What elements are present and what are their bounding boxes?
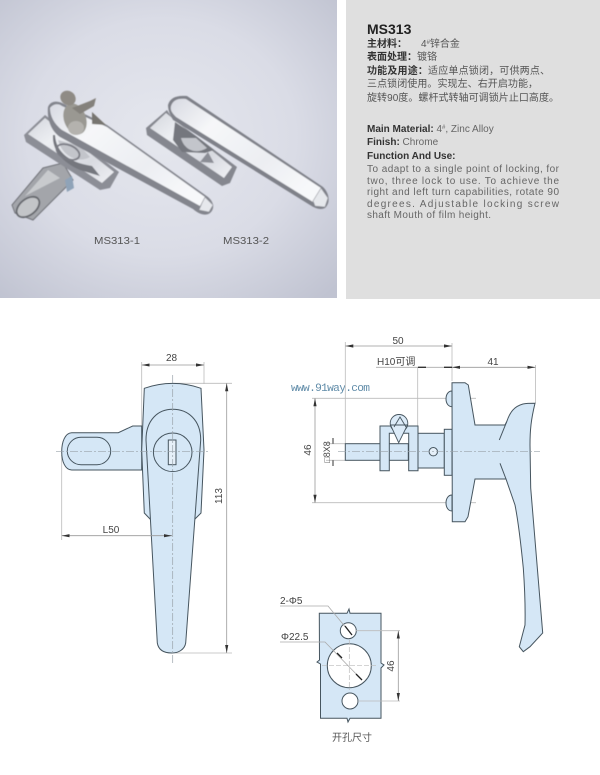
- photo: handle MS313-2: [146, 96, 329, 209]
- text: English specifications: #: [442, 125, 446, 131]
- label: 2-Φ5: [280, 596, 352, 635]
- text: English specifications: shaft Mouth of film height.: [367, 210, 491, 221]
- locking cone: [390, 414, 408, 443]
- diagram: side view: [303, 336, 543, 652]
- panel: specifications: [346, 0, 600, 299]
- label: Φ22.5: [280, 632, 362, 680]
- text: Chinese specifications: 主材料：: [367, 37, 407, 50]
- text: Chinese specifications: 功能及用途：适应单点锁闭，可供两点、: [367, 64, 550, 77]
- text: Chinese specifications: 表面处理：镀铬: [367, 50, 437, 63]
- dimension: 28: 28: [166, 353, 177, 364]
- text: English specifications: degrees. Adjustable locking screw: [367, 199, 560, 210]
- dimension: L50: L50: [103, 525, 120, 536]
- text: English specifications: right and left turn capabilities, rotate 90: [367, 187, 559, 198]
- caption: MS313-2: MS313-2: [223, 235, 269, 247]
- dimension: 46: [303, 398, 315, 503]
- dimension: 50: 50: [392, 336, 404, 347]
- dimension: 113: 113: [214, 488, 225, 504]
- text: Chinese specifications: [367, 37, 559, 104]
- label: 2-Φ5: 2-Φ5: [280, 596, 303, 607]
- small hole bottom: [342, 693, 358, 709]
- watermark: www.91way.com: [291, 383, 370, 395]
- cutout plate: [317, 609, 384, 722]
- label: Φ22.5: Φ22.5: [281, 632, 309, 643]
- text: English specifications: Finish: Chrome: [367, 137, 439, 148]
- heading: model number: MS313: [367, 21, 412, 37]
- photo: handle MS313-1 with key: [12, 88, 213, 221]
- caption: cutout size: 开孔尺寸: [332, 731, 372, 744]
- dimension: 46: 46: [303, 444, 314, 456]
- dimension: square 8x8: □8X8: [322, 441, 332, 463]
- text: Chinese specifications: 4: [421, 39, 427, 50]
- text: Chinese specifications: 锌合金: [430, 37, 460, 50]
- flange: [444, 429, 452, 475]
- dimension: H10 adjustable: [376, 356, 452, 368]
- text: English specifications: Main Material: 4: [367, 124, 442, 135]
- dimension: 41: 41: [487, 357, 499, 368]
- base plate: [142, 383, 204, 520]
- key slot: [168, 440, 176, 465]
- text: English specifications: , Zinc Alloy: [445, 124, 494, 135]
- text: Chinese specifications: #: [427, 40, 431, 46]
- dimension: 46: [386, 631, 398, 701]
- caption: MS313-1: MS313-1: [94, 235, 140, 247]
- pin hole: [429, 448, 437, 456]
- U bracket: [380, 426, 418, 471]
- dimension: H10 adjustable: H10可调: [377, 356, 415, 368]
- diagram: front view: [56, 353, 232, 663]
- small hole top: [340, 623, 356, 639]
- dimension: 41: [452, 357, 536, 368]
- text: English specifications: To adapt to a single point of locking, for: [367, 164, 560, 175]
- large hole: [327, 644, 371, 688]
- lock cylinder: [153, 433, 192, 472]
- text: Chinese specifications: 三点锁闭使用。实现左、右开启功能，: [367, 77, 538, 90]
- text: English specifications: Function And Use:: [367, 151, 456, 162]
- dimension: square 8x8: [322, 438, 333, 466]
- cylinder: [418, 433, 444, 468]
- handle: [146, 409, 201, 653]
- screws: [446, 391, 452, 511]
- dimension: 46: 46: [386, 660, 397, 672]
- lever arm: [62, 426, 142, 470]
- text: English specifications: [367, 124, 560, 221]
- text: Chinese specifications: 旋转90度。螺杆式转轴可调锁片止口高度。: [367, 91, 559, 104]
- text: English specifications: two, three lock to use. To achieve the: [367, 176, 559, 187]
- lever slot: [67, 437, 111, 465]
- dimension: L50: [62, 525, 172, 536]
- shaft: [345, 444, 408, 460]
- dimension: 28: [142, 353, 204, 365]
- panel: product photo: [0, 0, 337, 298]
- plate and handle profile: [452, 383, 543, 652]
- dimension: 50: [345, 336, 452, 347]
- diagram: cutout dimensions: [280, 596, 400, 744]
